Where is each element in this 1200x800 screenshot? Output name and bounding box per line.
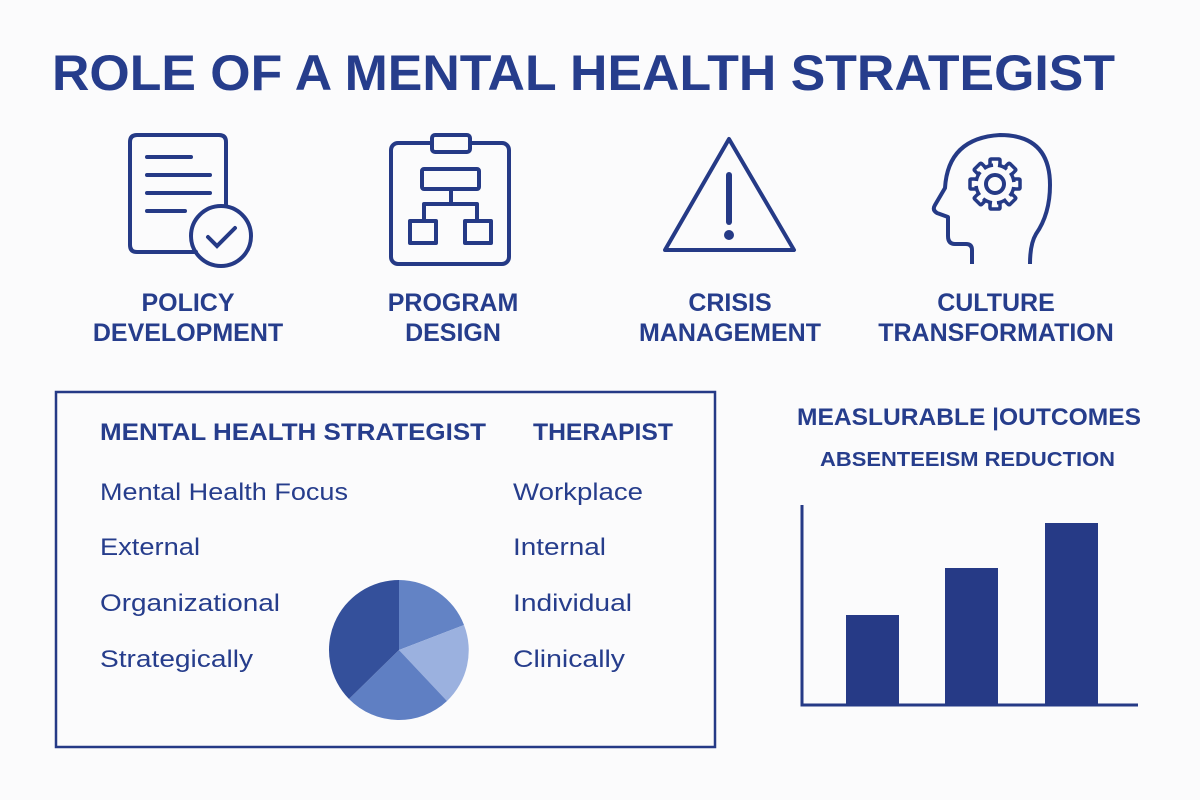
icon labels: POLICY: [141, 289, 235, 317]
panel: measurable outcomes: [797, 404, 1141, 705]
pie chart: [329, 580, 469, 720]
panel: comparison: Organizational: [100, 590, 280, 617]
icon labels: DEVELOPMENT: [93, 319, 283, 347]
icon labels: PROGRAM: [388, 289, 518, 317]
icon labels: CRISIS: [688, 289, 772, 317]
icon: program design: [391, 135, 509, 264]
panel: comparison: Individual: [513, 590, 632, 617]
icon: warning triangle: [665, 139, 794, 250]
icon: policy document: [130, 135, 251, 266]
title: ROLE OF A MENTAL HEALTH STRATEGIST: [52, 45, 1115, 101]
bar chart: [802, 505, 1138, 705]
panel: comparison: Clinically: [513, 646, 625, 673]
icon labels: TRANSFORMATION: [878, 319, 1114, 347]
icon: head with gear: [934, 135, 1050, 264]
panel: measurable outcomes: ABSENTEEISM REDUCTION: [820, 449, 1115, 471]
panel: comparison: Mental Health Focus: [100, 479, 348, 506]
panel: comparison: Strategically: [100, 646, 253, 673]
icon labels: DESIGN: [405, 319, 501, 347]
panel: comparison: [56, 392, 715, 747]
panel: comparison: Workplace: [513, 479, 643, 506]
icon labels: CULTURE: [937, 289, 1055, 317]
icon labels: MANAGEMENT: [639, 319, 821, 347]
panel: comparison: External: [100, 534, 200, 561]
panel: comparison: MENTAL HEALTH STRATEGIST: [100, 419, 486, 446]
icon labels: [93, 289, 1114, 347]
panel: comparison: THERAPIST: [533, 419, 673, 446]
panel: measurable outcomes: MEASLURABLE |OUTCOMES: [797, 404, 1141, 431]
panel: comparison: Internal: [513, 534, 606, 561]
